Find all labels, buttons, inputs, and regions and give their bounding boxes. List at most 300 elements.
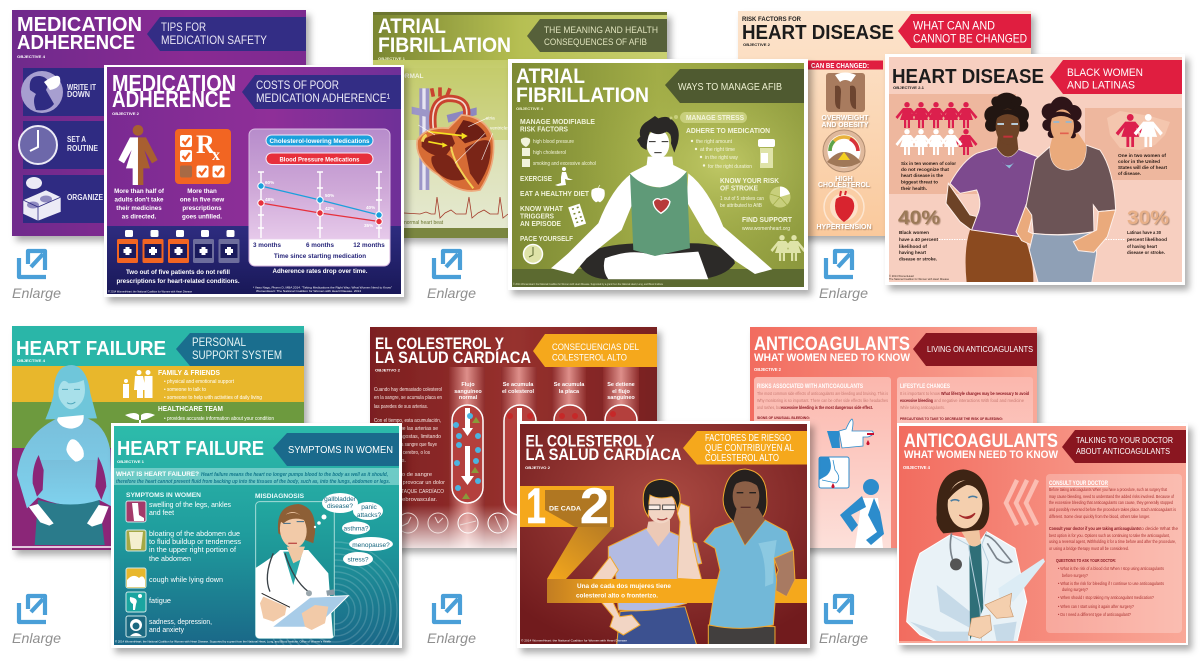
row: set a routine: ROUTINE (67, 144, 99, 153)
panel: heart disease risk factors (738, 11, 1031, 236)
chart: adherence line chart: 6 months (306, 242, 334, 249)
caption: una de cada dos: Una de cada dos mujeres tiene (577, 583, 671, 590)
heading: medication adherence: OBJECTIVE 2 (112, 111, 140, 116)
icon row: bottles (117, 230, 240, 263)
footer: © 2014 WomenHeart: the National Coalition for Women with Heart Disease. Supported by a grant from the National Heart, Lung, and Blood Institute. Office of Women's Health (115, 640, 331, 644)
card: consult your doctor: and possibly reversed before the procedure takes place. Each anticoagulant is (1049, 507, 1177, 512)
symptom: bloating: bloating of the abdomen due (149, 531, 240, 538)
stat: 1 de cada 2: 2 (580, 478, 609, 534)
text: healthcare team: • provides accurate information about your condition (164, 416, 274, 422)
definition strip (114, 468, 399, 485)
chart: adherence line chart: 3 months (253, 242, 281, 249)
stat: 30 percent: percent likelihood (1127, 237, 1167, 243)
column labels: Se acumula (503, 382, 534, 388)
row: write it down: DOWN (67, 90, 90, 99)
text: cholesterol explanation: Cuando hay demasiado colesterol (374, 387, 442, 393)
row: write it down (21, 68, 306, 116)
artery columns (449, 367, 639, 548)
subheads (126, 493, 304, 500)
heading: medication adherence: OBJECTIVE 4 (17, 54, 46, 59)
pictogram: six in ten women (896, 102, 978, 155)
heading: risk factors for heart disease: HEART DISEASE (742, 22, 894, 44)
icon: overweight and obesity (822, 72, 869, 129)
heading: anticoagulants what women need to know: WHAT WOMEN NEED TO KNOW (754, 352, 911, 364)
text: lifestyle tips: AN EPISODE (520, 221, 561, 228)
enlarge link: heart disease (819, 251, 868, 301)
banner: symptoms in women: SYMPTOMS IN WOMEN (288, 444, 393, 456)
text: cholesterol explanation: hacia el cerebro, o los (386, 450, 430, 456)
card: lifestyle changes: What lifestyle changes may be necessary to avoid (941, 391, 1029, 396)
heading: heart disease: OBJECTIVE 2.1 (893, 85, 925, 90)
heading: atrial fibrillation: ATRIAL (516, 65, 585, 88)
heading: medication adherence: MEDICATION (17, 14, 142, 36)
symptom: swelling: and feet (149, 510, 174, 517)
icon: thumb bleeding (827, 419, 874, 448)
symptom: sadness: and anxiety (149, 627, 184, 634)
text: cholesterol explanation: vuelvan angostas, limitando (378, 434, 441, 440)
card: consult your doctor: • When can I start using it again after surgery? (1058, 604, 1134, 609)
text: adhere to medication (686, 128, 770, 170)
text: one in two: color in the United (1118, 159, 1160, 165)
banner: black women and latinas: AND LATINAS (1067, 80, 1135, 92)
heading: anticoagulants what women need to know (754, 334, 911, 372)
thought bubble: manage stress: MANAGE STRESS (686, 115, 744, 122)
heading: medication adherence (112, 70, 236, 116)
row: set a routine: SET A (67, 135, 86, 144)
text: cholesterol explanation: hace que las arterias se (385, 426, 438, 432)
enlarge link: anticoagulants: Enlarge (819, 630, 868, 646)
icon: hypertension heart: HYPERTENSION (816, 224, 872, 231)
text: six in ten: their health. (901, 186, 927, 192)
banner: ways to manage afib (665, 69, 804, 103)
banner: consecuencias del colesterol alto: CONSECUENCIAS DEL (552, 342, 639, 352)
heading: heart failure: HEART FAILURE (16, 338, 166, 360)
card: consult your doctor: • Do I need a different type of anticoagulant? (1058, 612, 1131, 617)
banner: symptoms in women (273, 433, 399, 466)
text: manage modifiable risk factors: smoking and excessive alcohol (533, 161, 596, 167)
artery: blocked (604, 404, 638, 421)
card: consult your doctor: • What is the risk for bleeding if I continue to use anticoagulants (1058, 581, 1165, 586)
heading: el colesterol y la salud cardiaca: OBJETIVO 2 (375, 368, 401, 372)
card: consult your doctor: best option is for you. Options such as continuing to take the anticoagulant, (1049, 533, 1170, 538)
column labels: el colesterol (502, 389, 535, 395)
text: know your risk of stroke: be attributed to AfiB (720, 203, 763, 209)
illustration: doctor in white coat (907, 469, 1045, 643)
text: cholesterol explanation: cerebrovascular. (394, 497, 437, 503)
symptom: bloating: the abdomen (149, 556, 191, 563)
card: lifestyle changes: It is important to know (900, 391, 941, 396)
subheads: SYMPTOMS IN WOMEN (126, 493, 201, 499)
text: cholesterol explanation: El flujo de sangre (388, 472, 432, 478)
illustration: latina woman (1016, 97, 1116, 283)
card: consult your doctor: CONSULT YOUR DOCTOR (1049, 480, 1108, 487)
panel: el colesterol consequences (370, 327, 657, 548)
text: lifestyle tips: PACE YOURSELF (520, 236, 574, 243)
card: risks: The most common side effects of anticoagulants are bleeding and bruising. This is (757, 391, 889, 396)
banner: personal support system: SUPPORT SYSTEM (192, 348, 282, 362)
legend: cholesterol pill: Cholesterol-lowering Medications (270, 138, 370, 145)
illustration: ecg trace (404, 197, 508, 218)
enlarge link: anticoagulants (819, 596, 868, 646)
icon: pie chart (770, 186, 790, 208)
stat: 40 percent (898, 208, 967, 262)
symptom: swelling (126, 501, 231, 522)
symptom: bloating: in the upper right portion of (149, 547, 236, 554)
series: blue line (258, 183, 382, 218)
map and two women pictogram (1107, 111, 1170, 150)
text: adhere to medication: for the right duration (708, 164, 752, 170)
column labels: sanguíneo (607, 395, 635, 401)
banner: living on anticoagulants: LIVING ON ANTICOAGULANTS (927, 344, 1033, 354)
banner: tips for medication safety (147, 17, 306, 51)
panel: heart disease black women and latinas (885, 54, 1185, 285)
panel: atrial fibrillation meaning (373, 12, 667, 238)
heading: atrial fibrillation: FIBRILLATION (378, 34, 511, 57)
text: know your risk of stroke: 1 out of 5 strokes can (720, 196, 764, 202)
illustration: woman with glasses (590, 479, 702, 645)
label: normal heart: NORMAL (395, 73, 424, 80)
card: consult your doctor: during surgery? (1062, 587, 1088, 592)
chevron arrows (1006, 480, 1037, 525)
footer band (404, 228, 508, 238)
banner: meaning and consequences of afib: CONSEQUENCES OF AFIB (544, 37, 647, 48)
enlarge link: heart failure: Enlarge (12, 630, 61, 646)
text: adults do not take medicine (114, 188, 165, 220)
stat: 40 percent: disease or stroke. (899, 256, 937, 262)
caption: una de cada dos: colesterol alto o fronterizo. (576, 592, 658, 600)
text: one in two (1118, 153, 1167, 177)
text: lifestyle tips: TRIGGERS (520, 214, 554, 220)
footer strip (12, 546, 112, 548)
text: cholesterol explanation: pulmones. (380, 458, 406, 464)
banner: what can and cannot be changed: CANNOT BE CHANGED (913, 32, 1027, 46)
banner: black women and latinas (1050, 60, 1182, 94)
text: one in two: States will die of heart (1118, 165, 1167, 171)
card: lifestyle changes (897, 377, 1033, 557)
footer: © 2014 WomenHeart (889, 274, 914, 278)
card: consult your doctor: Consult your doctor if you are taking anticoagulants (1049, 526, 1140, 531)
legend: blood pressure pill (266, 153, 373, 164)
card: consult your doctor: different. Some clear quickly from the blood, others take longer. (1049, 514, 1150, 519)
text: healthcare team (125, 406, 274, 423)
card: risks: SIGNS OF UNUSUAL BLEEDING: (757, 415, 810, 420)
banner: personal support system: PERSONAL (192, 335, 246, 349)
icon: prescription checklist (175, 129, 231, 184)
text: cholesterol explanation: o un ATAQUE CARDÍACO (388, 488, 444, 495)
card: lifestyle changes: PRECAUTIONS TO TAKE TO DECREASE THE RISK OF BLEEDING: (900, 416, 1003, 421)
icon: apple (592, 185, 604, 202)
row: organize (23, 175, 306, 223)
heading: el colesterol y la salud cardiaca: EL COLESTEROL Y (375, 335, 504, 353)
card: risks (754, 377, 891, 557)
panel: medication adherence tips (12, 10, 306, 236)
heading: el colesterol y la salud cardiaca: LA SALUD CARDÍACA (375, 348, 531, 367)
text: one in two: One in two women of (1118, 153, 1166, 159)
text: six in ten: heart disease is the (901, 173, 943, 179)
stat: 30 percent: of having heart (1127, 244, 1157, 250)
symptom: swelling: swelling of the legs, ankles (149, 502, 231, 509)
caption: una de cada dos (576, 583, 671, 600)
text: cholesterol explanation (374, 387, 445, 503)
heading: medication adherence (17, 14, 142, 59)
row: write it down: WRITE IT (67, 83, 96, 92)
caption: adherence drop: Adherence rates drop over time. (273, 268, 368, 275)
illustration: heart diagram (412, 87, 510, 191)
card: consult your doctor: • What is the risk of a blood clot When I stop using anticoagulants (1058, 566, 1165, 571)
banner: talking to your doctor: ABOUT ANTICOAGULANTS (1076, 446, 1170, 456)
column labels: sanguíneo (454, 389, 482, 395)
heading: atrial fibrillation (516, 65, 649, 111)
heading: heart disease: HEART DISEASE (892, 66, 1044, 88)
row: organize: ORGANIZE (67, 193, 104, 202)
heading: atrial fibrillation (378, 18, 510, 60)
text: healthcare team: HEALTHCARE TEAM (158, 404, 223, 413)
text: family and friends: • someone to talk to (164, 387, 206, 393)
banner: ways to manage afib: WAYS TO MANAGE AFIB (678, 82, 782, 93)
heading: anticoagulants what women need to know: OBJECTIVE 4 (903, 465, 931, 470)
text: unfilled prescriptions: More than (187, 188, 217, 195)
thought bubbles: asthma? (344, 526, 369, 532)
enlarge link: heart disease: Enlarge (819, 285, 868, 301)
banner: costs of poor adherence: COSTS OF POOR (256, 78, 339, 92)
card: consult your doctor: using a reversal agent, Withholding it for a time before and after the procedure, (1049, 539, 1176, 544)
enlarge link: heart failure (12, 596, 61, 646)
card: risks: RISKS ASSOCIATED WITH ANTICOAGULANTS (757, 383, 863, 390)
panel: el colesterol risk factors (517, 421, 810, 648)
text: refill statement: prescriptions for heart-related conditions. (116, 278, 240, 285)
text: adhere to medication: in the right way (705, 155, 738, 161)
text: manage modifiable risk factors: MANAGE MODIFIABLE (520, 119, 595, 126)
card: consult your doctor: • When should I stop taking my anticoagulant medication? (1058, 595, 1154, 600)
card: risks: Why monitoring is so important. There can be other side effects like headaches (757, 398, 889, 403)
column labels (454, 382, 635, 401)
illustration: meditating woman (551, 116, 772, 279)
heading: heart failure: HEART FAILURE (117, 437, 264, 460)
clocks (398, 513, 508, 533)
heading: anticoagulants what women need to know (903, 431, 1059, 470)
strip: can be changed: CAN BE CHANGED: (811, 63, 869, 70)
text: adults do not take medicine: More than half of (114, 188, 165, 195)
banner: talking to your doctor (1062, 430, 1186, 463)
stat: 40 percent: Black women (899, 230, 929, 236)
enlarge link: atrial fibrillation: Enlarge (427, 285, 476, 301)
banner: factores de riesgo: FACTORES DE RIESGO (705, 433, 791, 444)
definition strip: therefore the heart cannot prevent fluid from backing up into the tissues of the body, such as, into the lungs, abdomen or legs. (116, 479, 390, 485)
text: know your risk of stroke: OF STROKE (720, 186, 758, 192)
banner: living on anticoagulants (913, 333, 1037, 366)
heading: medication adherence: ADHERENCE (17, 32, 135, 54)
thought bubbles: disease? (327, 503, 353, 510)
text: lifestyle tips: KNOW WHAT (520, 206, 564, 213)
heading: el colesterol y la salud cardiaca: LA SALUD CARDÍACA (526, 445, 682, 464)
icon: hypertension heart (816, 187, 872, 231)
heading: anticoagulants what women need to know: ANTICOAGULANTS (904, 431, 1058, 452)
symptom: bloating (126, 530, 241, 563)
illustration: doctor (255, 502, 348, 640)
text: six in ten (901, 161, 956, 192)
card: consult your doctor: QUESTIONS TO ASK YOUR DOCTOR: (1056, 558, 1116, 563)
card: consult your doctor (1046, 474, 1182, 633)
banner: personal support system (176, 333, 304, 366)
chart: adherence line chart: 48% (265, 197, 274, 202)
heading: risk factors for heart disease (742, 16, 894, 47)
icon: high cholesterol gauge: CHOLESTEROL (818, 182, 871, 189)
text: know your risk of stroke: KNOW YOUR RISK (720, 178, 779, 185)
banner: consecuencias del colesterol alto (533, 334, 657, 367)
chart: adherence line chart: Time since starting medication (274, 253, 366, 260)
strip: orange caption band (547, 579, 807, 603)
icon: high cholesterol gauge (818, 130, 871, 189)
footnote: ¹ Vaso Nagy, Pharm D, MBA 2014. "Taking Medications the Right Way: What Women Need to Know" (253, 286, 392, 290)
heading: anticoagulants what women need to know: OBJECTIVE 2 (754, 367, 782, 372)
column labels: normal (459, 395, 478, 401)
stat: 30 percent: disease or stroke. (1127, 250, 1165, 256)
card: lifestyle changes: While taking anticoagulants. (900, 405, 945, 410)
chart: adherence line chart (249, 129, 390, 266)
text: adhere to medication: ADHERE TO MEDICATION (686, 128, 770, 135)
heading: el colesterol y la salud cardiaca (525, 432, 682, 470)
icon: nose bleed (819, 457, 849, 488)
thought bubbles: stress? (348, 556, 369, 564)
card: consult your doctor: Before taking anticoagulants When you have a procedure, such as surgery that (1049, 487, 1168, 492)
stat: 1 de cada 2 (526, 478, 609, 534)
panel: heart failure symptoms in women (111, 423, 403, 662)
tinted bands (889, 94, 1182, 194)
icon: clock (524, 244, 542, 264)
card: lifestyle changes: excessive bleeding (900, 398, 933, 403)
heading: medication adherence: ADHERENCE (112, 86, 231, 112)
footer (889, 274, 949, 281)
chart: adherence line chart: 12 months (353, 242, 385, 249)
text: unfilled prescriptions: prescriptions (182, 205, 222, 212)
banner: tips for medication safety: MEDICATION SAFETY (161, 33, 267, 47)
heading: anticoagulants what women need to know: ANTICOAGULANTS (754, 334, 910, 355)
text: unfilled prescriptions (180, 188, 224, 220)
icon: half person pictogram (118, 125, 158, 185)
icon: pill pack (568, 204, 586, 227)
chart: adherence line chart: 42% (325, 206, 334, 211)
banner: costs of poor adherence (242, 75, 401, 109)
text: adhere to medication: the right amount (696, 139, 732, 145)
text: manage modifiable risk factors: high cholesterol (533, 150, 566, 156)
stat: 30 percent (1103, 208, 1169, 256)
icon: woman back pain (840, 479, 884, 548)
text: cholesterol explanation: en la sangre, se acumula placa en (374, 395, 442, 401)
heading: heart failure: OBJECTIVE 1 (117, 459, 145, 464)
banner: black women and latinas: BLACK WOMEN (1067, 67, 1143, 79)
stat: 40 percent: 40% (898, 208, 940, 229)
card: lifestyle changes: LIFESTYLE CHANGES (900, 383, 950, 390)
text: lifestyle tips: EAT A HEALTHY DIET (520, 191, 590, 198)
lower navy band (107, 226, 401, 294)
color bands (12, 366, 304, 550)
artery: normal flow (452, 405, 483, 503)
symptom: sadness (126, 616, 212, 637)
text: know your risk of stroke (720, 178, 779, 209)
panel: atrial fibrillation ways to manage (508, 59, 808, 290)
symptom: sadness: sadness, depression, (149, 619, 212, 626)
enlarge link: medication (12, 251, 61, 301)
text: family and friends (158, 368, 262, 401)
stat: 1 de cada 2: 1 (526, 478, 546, 534)
legend: blood pressure pill: Blood Pressure Medications (280, 156, 360, 164)
heading: heart failure: OBJECTIVE 4 (17, 358, 46, 363)
card: consult your doctor: may cause bleeding, need to understand the added risks involved. Because of (1049, 494, 1175, 499)
heading: atrial fibrillation: ATRIAL (378, 15, 446, 38)
text: adults do not take medicine: adults don't take (115, 196, 164, 204)
illustration: woman with heart (17, 365, 112, 545)
graphic: orange z shape (520, 486, 614, 579)
banner: tips for medication safety: TIPS FOR (161, 20, 206, 34)
caption: normal heart beat: normal heart beat (404, 220, 444, 226)
footnote: WomenHeart: The National Coalition for Women with Heart Disease. 2014 (256, 289, 361, 293)
banner: what can and cannot be changed: WHAT CAN AND (913, 18, 995, 32)
icon: pill bottle (758, 139, 775, 168)
card: consult your doctor: to decide What the (1140, 526, 1179, 531)
strip: can be changed (808, 60, 883, 70)
footer: © 2014 WomenHeart: the National Coalition for Women with Heart Disease. Supported by a grant from the National Heart, Lung, and Blood Institute (513, 282, 663, 286)
icon: overweight and obesity: AND OBESITY (822, 122, 869, 129)
enlarge link: colesterol: Enlarge (427, 630, 476, 646)
heading: el colesterol y la salud cardiaca (375, 335, 531, 372)
symptom: cough: cough while lying down (149, 577, 223, 584)
illustration: heart diagram: atria (486, 115, 495, 120)
text: unfilled prescriptions: goes unfilled. (182, 214, 222, 220)
banner: factores de riesgo (683, 431, 807, 464)
card: risks: excessive bleeding is the most dangerous side effect. (781, 405, 873, 410)
chart: adherence line chart: 35% (364, 223, 373, 228)
text: one in two: of disease. (1118, 171, 1141, 177)
card: lifestyle changes: and negative interactions With food and medicine (934, 398, 1024, 403)
stat: 40 percent: have a 40 percent (899, 237, 938, 243)
chart: adherence line chart: 60% (265, 180, 274, 185)
enlarge link: colesterol (427, 596, 476, 646)
heading: atrial fibrillation: OBJECTIVE 1 (378, 56, 406, 61)
panel: anticoagulants talking to doctor (897, 423, 1188, 645)
text: six in ten: biggest threat to (901, 180, 938, 186)
definition strip: Heart failure means the heart no longer pumps blood to the body as well as it should, (201, 472, 388, 478)
banner: consecuencias del colesterol alto: COLESTEROL ALTO (552, 352, 627, 362)
footer: © 2014 WomenHeart: the National Coalition for Women with Heart Disease (521, 638, 627, 642)
footnote: © 2014 WomenHeart: the National Coalition for Women with Heart Disease (108, 290, 192, 294)
artery: cholesterol build up (504, 405, 536, 515)
definition strip: WHAT IS HEART FAILURE? (116, 471, 199, 478)
panel: anticoagulants living on (750, 327, 1037, 557)
text: manage modifiable risk factors: high blood pressure (533, 139, 574, 145)
heading: anticoagulants what women need to know: WHAT WOMEN NEED TO KNOW (904, 449, 1059, 461)
thought bubbles: panic (361, 504, 378, 511)
text: refill statement: Two out of five patients do not refill (126, 269, 230, 276)
thought bubble: manage stress (670, 112, 747, 123)
illustration: heart diagram: ventricles (490, 125, 510, 130)
enlarge link: atrial fibrillation (427, 251, 476, 301)
row: set a routine (19, 121, 306, 169)
heading: atrial fibrillation: OBJECTIVE 4 (516, 106, 544, 111)
chart: adherence line chart: 50% (325, 193, 334, 198)
footer fade (402, 507, 517, 548)
icon: prescription checklist: R (196, 130, 215, 159)
column labels: el flujo (612, 389, 630, 395)
icon: prescription checklist: x (212, 147, 220, 164)
text: lifestyle tips: EXERCISE (520, 176, 552, 183)
banner: factores de riesgo: QUE CONTRIBUYEN AL (705, 443, 794, 454)
text: find support: www.womenheart.org (742, 226, 790, 232)
icon: high cholesterol gauge: HIGH (835, 176, 853, 183)
enlarge link: medication: Enlarge (12, 285, 61, 301)
panel: heart failure support system (12, 326, 304, 550)
series: red line (258, 200, 382, 225)
illustration: woman in blue shirt (704, 469, 795, 646)
